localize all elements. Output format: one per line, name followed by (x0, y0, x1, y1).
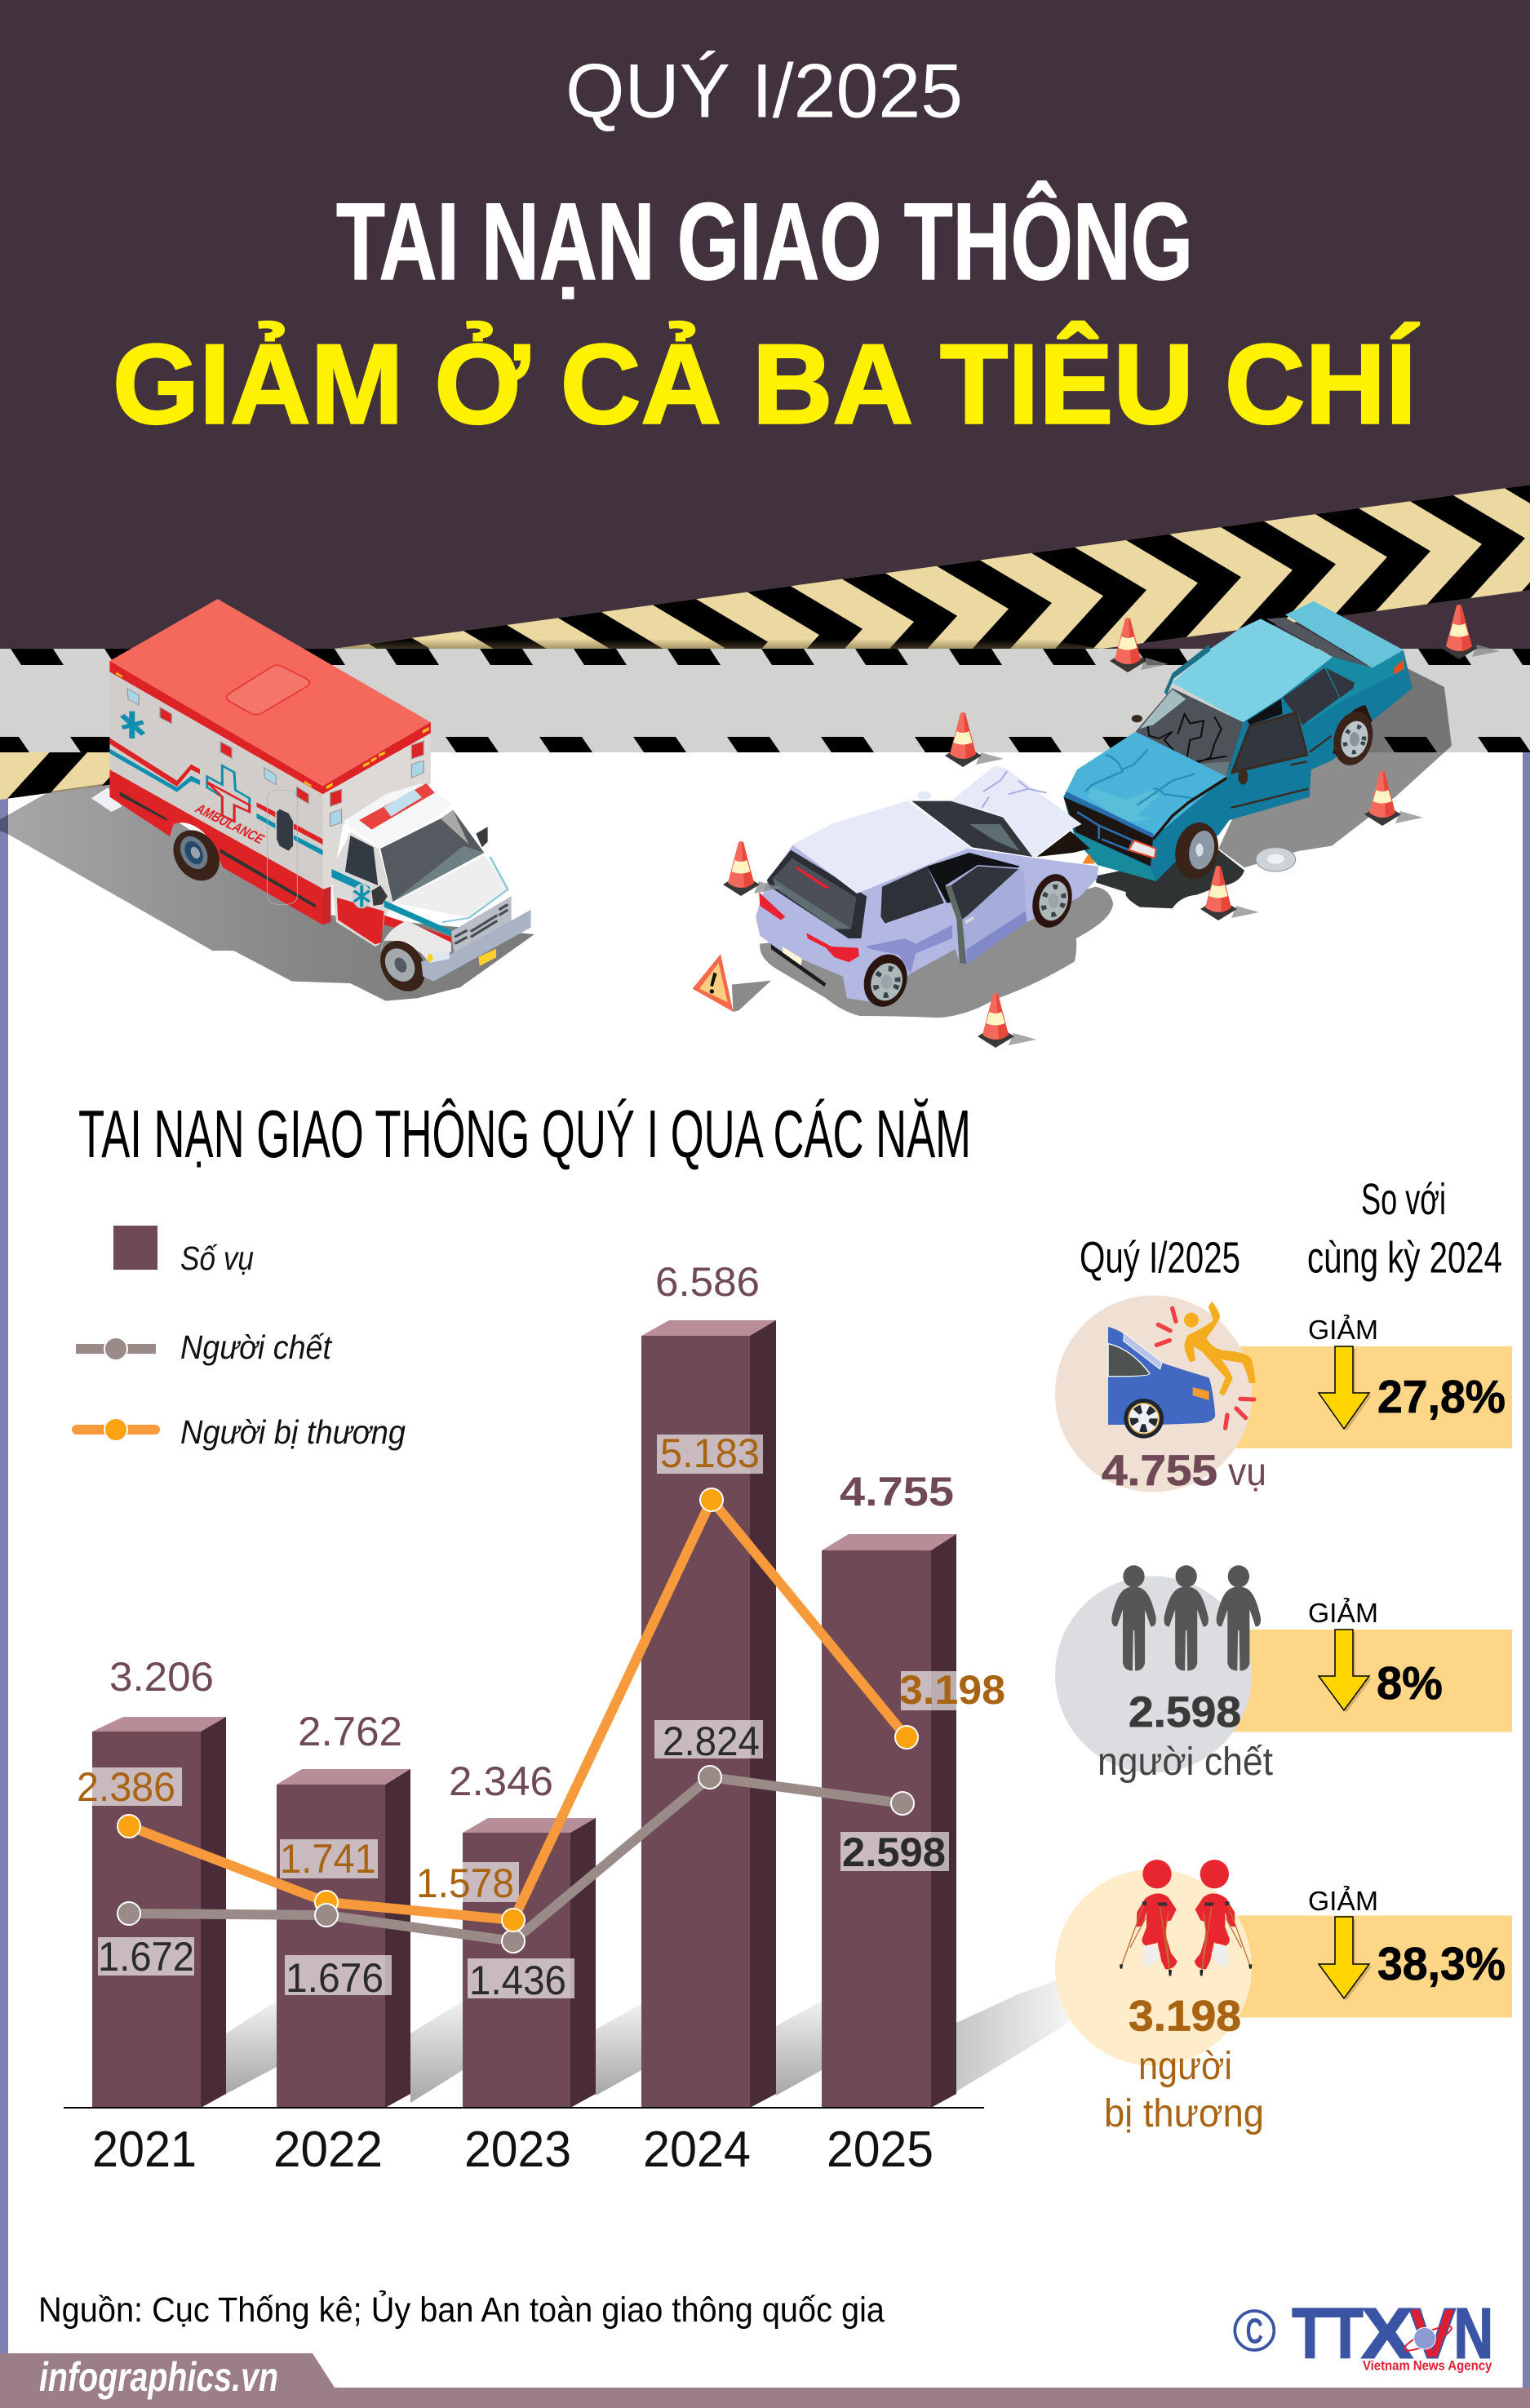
death values: 1.676 (286, 1955, 384, 2001)
ambulance roof (109, 599, 431, 786)
white car far fender (917, 792, 931, 800)
TTXVN wordmark: N (1454, 2293, 1493, 2373)
year labels: 2024 (643, 2122, 751, 2178)
ambulance shadow (0, 782, 534, 1001)
legend (72, 1226, 406, 1451)
cone 7 (1441, 605, 1500, 659)
far mirror (1132, 715, 1142, 722)
upper side panel (1281, 650, 1405, 724)
lower side shading (865, 925, 952, 973)
label: decrease: GIẢM (1308, 1598, 1378, 1628)
unit: injured line 1: người (1138, 2045, 1232, 2088)
copyright mark (1235, 2311, 1274, 2352)
value boxes (92, 1435, 956, 1998)
cone 3 (1110, 618, 1169, 672)
side window (880, 867, 944, 924)
oil puddle (1096, 850, 1244, 908)
door handle (965, 916, 973, 924)
hood (392, 855, 510, 918)
hood creases (982, 771, 1047, 808)
cross outline (207, 765, 250, 822)
side window (1283, 667, 1340, 725)
star of life (122, 712, 144, 738)
roof rim (109, 661, 431, 794)
TTXVN wordmark: X (1361, 2293, 1413, 2373)
injured values (77, 1430, 1005, 1906)
chevron tape band (0, 472, 1530, 805)
death values: 2.824 (663, 1718, 760, 1764)
legend line: injured (72, 1418, 160, 1441)
car body (1108, 1327, 1215, 1425)
blue car rear wheel (1328, 705, 1378, 769)
chart heading: TAI NẠN GIAO THÔNG QUÝ I QUA CÁC NĂM (78, 1096, 971, 1172)
injured values: 5.183 (660, 1430, 760, 1476)
box lower red (109, 769, 323, 925)
legend label: accidents: Số vụ (180, 1239, 254, 1277)
accident values: 2.346 (449, 1758, 553, 1804)
arrow: down (1319, 1630, 1372, 1713)
white car (693, 765, 1098, 1012)
injured values: 1.578 (416, 1860, 514, 1906)
TTXVN wordmark: V (1409, 2293, 1456, 2373)
white car body (756, 801, 1098, 1004)
value: injured change: 38,3% (1377, 1938, 1506, 1990)
bar 2023 (463, 1818, 596, 2108)
tail lights (759, 892, 859, 962)
blue car (1063, 601, 1412, 883)
ambulance text: AMBULANCE (192, 801, 268, 846)
source: Nguồn: Cục Thống kê; Ủy ban An toàn giao thông quốc gia (38, 2290, 885, 2330)
icon: injured people with crutches (1120, 1860, 1252, 1976)
door window (277, 809, 293, 851)
unit: accidents: vụ (1228, 1451, 1266, 1494)
logo (1235, 2293, 1493, 2373)
side stripes (109, 738, 323, 845)
cone 2 (978, 993, 1036, 1048)
death point 2022 (315, 1904, 338, 1927)
road strip (0, 649, 1530, 752)
circle: deaths (1055, 1577, 1252, 1772)
impact ticks (1156, 1308, 1254, 1428)
unit: deaths: người chết (1098, 1741, 1273, 1784)
arrow: down (1319, 1346, 1372, 1431)
car headlight (1193, 1387, 1209, 1400)
panel: deaths (1055, 1565, 1512, 1784)
value: accidents change: 27,8% (1377, 1371, 1506, 1423)
band: deaths (1224, 1630, 1512, 1732)
orange marker (1082, 854, 1095, 863)
fender dark line (1153, 778, 1226, 839)
value: deaths: 2.598 (1129, 1688, 1241, 1736)
car side window (1108, 1344, 1150, 1377)
open door (1230, 712, 1310, 820)
door window (951, 867, 1018, 920)
pedestrian (1184, 1302, 1255, 1396)
bar 2021 (92, 1717, 226, 2108)
death values (98, 1718, 946, 2003)
white car front wheel (1027, 870, 1077, 932)
deaths line (118, 1766, 914, 1953)
icon: car hitting pedestrian (1108, 1302, 1255, 1439)
right border stripe (1523, 752, 1530, 2392)
door opening (927, 853, 1020, 903)
year labels: 2023 (464, 2122, 571, 2178)
copyright mark: C (1246, 2313, 1263, 2352)
license plate (783, 947, 802, 969)
loose hubcap (1256, 848, 1296, 871)
circle: accidents (1055, 1296, 1252, 1492)
undertray (771, 944, 826, 987)
footer bar (0, 2353, 1530, 2408)
value: deaths change: 8% (1377, 1657, 1443, 1710)
right injured figure (1195, 1860, 1252, 1976)
death values: 2.598 (842, 1829, 946, 1875)
white car rear wheel (858, 949, 913, 1012)
blue car body (1063, 650, 1412, 881)
label: decrease: GIẢM (1308, 1315, 1378, 1345)
accident values: 2.762 (298, 1709, 402, 1754)
value: accidents: 4.755 (1102, 1447, 1217, 1495)
rear window frame (767, 850, 867, 938)
roof hatch (227, 665, 309, 715)
year labels (92, 2122, 934, 2178)
blue car windshield (1136, 688, 1243, 777)
cab door (331, 832, 392, 947)
windshield (380, 810, 484, 902)
heading: quarter: QUÝ I/2025 (565, 47, 963, 134)
cab door lower red (337, 898, 384, 944)
cone 6 (945, 712, 1004, 767)
front wheel (1170, 818, 1223, 883)
year labels: 2025 (827, 2122, 934, 2178)
panel: injured (1055, 1860, 1512, 2135)
lower bumper (1075, 832, 1156, 881)
rear window (773, 858, 856, 929)
footer site name: infographics.vn (39, 2354, 278, 2400)
trunk (1285, 601, 1404, 667)
windshield cracks (1148, 714, 1226, 765)
cab door window (345, 836, 378, 885)
door window (1232, 712, 1307, 773)
grille (451, 896, 512, 959)
white car shadow (760, 887, 1113, 1018)
roof lamps (116, 672, 429, 789)
mirror stalk (1164, 645, 1210, 695)
injured values: 2.386 (77, 1764, 175, 1810)
accident values: 3.206 (109, 1654, 214, 1700)
header background (0, 0, 1530, 649)
box front face (323, 733, 431, 891)
injured values: 1.741 (280, 1836, 376, 1882)
brake strip (795, 866, 829, 889)
hood cracks (1085, 749, 1195, 805)
bar 2025 (822, 1534, 956, 2108)
heading: title line 2: GIẢM Ở CẢ BA TIÊU CHÍ (113, 320, 1419, 447)
cone 5 (1200, 866, 1259, 920)
cone 4 (1364, 771, 1423, 826)
front wheel (373, 920, 451, 996)
tail light (1394, 659, 1404, 675)
lower dark strips (120, 792, 316, 908)
accident values: 6.586 (655, 1259, 760, 1305)
cab roof (344, 783, 453, 849)
headlight (1129, 840, 1156, 858)
car interior (1247, 699, 1283, 725)
marker lights (127, 689, 424, 827)
legend label: deaths: Người chết (180, 1328, 332, 1366)
bar 2022 (277, 1769, 410, 2108)
heading: title line 1: TAI NẠN GIAO THÔNG (336, 181, 1193, 303)
year labels: 2021 (92, 2122, 197, 2178)
left border stripe (0, 792, 8, 2366)
headlight and plate (428, 951, 450, 963)
TTXVN wordmark: T (1292, 2293, 1328, 2373)
white car windshield (911, 801, 1032, 857)
hood (1067, 732, 1226, 838)
death values: 1.436 (469, 1958, 566, 2003)
car wheel (1124, 1399, 1164, 1439)
cab stripe (331, 869, 370, 895)
globe (1402, 2322, 1454, 2355)
accident values: 4.755 (840, 1469, 954, 1514)
door mirror (1238, 769, 1248, 785)
bar 2024 (641, 1320, 776, 2108)
value: injured: 3.198 (1129, 1993, 1241, 2040)
rear step (91, 787, 122, 812)
car windshield (1124, 1333, 1162, 1369)
ambulance (91, 599, 531, 996)
column heading: quarter: Quý I/2025 (1080, 1234, 1240, 1283)
tape shade (334, 639, 1102, 649)
year labels: 2022 (273, 2122, 383, 2178)
TTXVN wordmark (1292, 2293, 1493, 2373)
warning sign shadow (732, 981, 771, 1012)
warning triangle (693, 954, 734, 1012)
side mirror (371, 885, 388, 906)
TTXVN wordmark: T (1328, 2293, 1364, 2373)
rear door (267, 790, 297, 904)
chart baseline (64, 2107, 984, 2109)
open door panel (946, 865, 1027, 965)
bar shadows (226, 1975, 1072, 2103)
roof (1173, 619, 1333, 722)
blue car shadow (1218, 667, 1452, 867)
white car roof (792, 801, 971, 894)
panel: accidents (1055, 1296, 1512, 1495)
injured values: 3.198 (899, 1667, 1005, 1713)
legend line: deaths (76, 1337, 156, 1360)
band: injured (1224, 1916, 1512, 2017)
grille (1063, 792, 1153, 867)
door trim (1231, 736, 1332, 808)
left injured figure (1120, 1860, 1177, 1976)
agency name: Vietnam News Agency (1363, 2357, 1492, 2373)
door edge (946, 885, 966, 965)
legend label: injured: Người bị thương (180, 1413, 406, 1451)
box side panel (109, 672, 323, 889)
death values: 1.672 (98, 1934, 194, 1980)
cone 1 (723, 841, 782, 896)
accident values (109, 1259, 954, 1804)
bumper (421, 910, 531, 982)
rear window (1266, 618, 1373, 667)
door star badge (353, 884, 371, 908)
engine bay (1036, 831, 1090, 857)
body background (0, 649, 1530, 2408)
ambulance rear wheel (166, 826, 227, 885)
unit: injured line 2: bị thương (1104, 2092, 1264, 2135)
legend swatch: accidents (113, 1226, 157, 1270)
column heading: compare line 1: So với (1361, 1175, 1446, 1224)
light bar (359, 783, 435, 830)
crumpled hood (951, 765, 1082, 858)
bar chart (64, 1259, 1072, 2178)
circle: injured (1055, 1869, 1252, 2066)
injured line (118, 1488, 918, 1931)
label: decrease: GIẢM (1308, 1886, 1378, 1916)
band: accidents (1224, 1346, 1512, 1448)
hood stripe (384, 900, 451, 936)
icon: three people (1111, 1565, 1261, 1670)
arrow: down (1319, 1917, 1372, 2001)
